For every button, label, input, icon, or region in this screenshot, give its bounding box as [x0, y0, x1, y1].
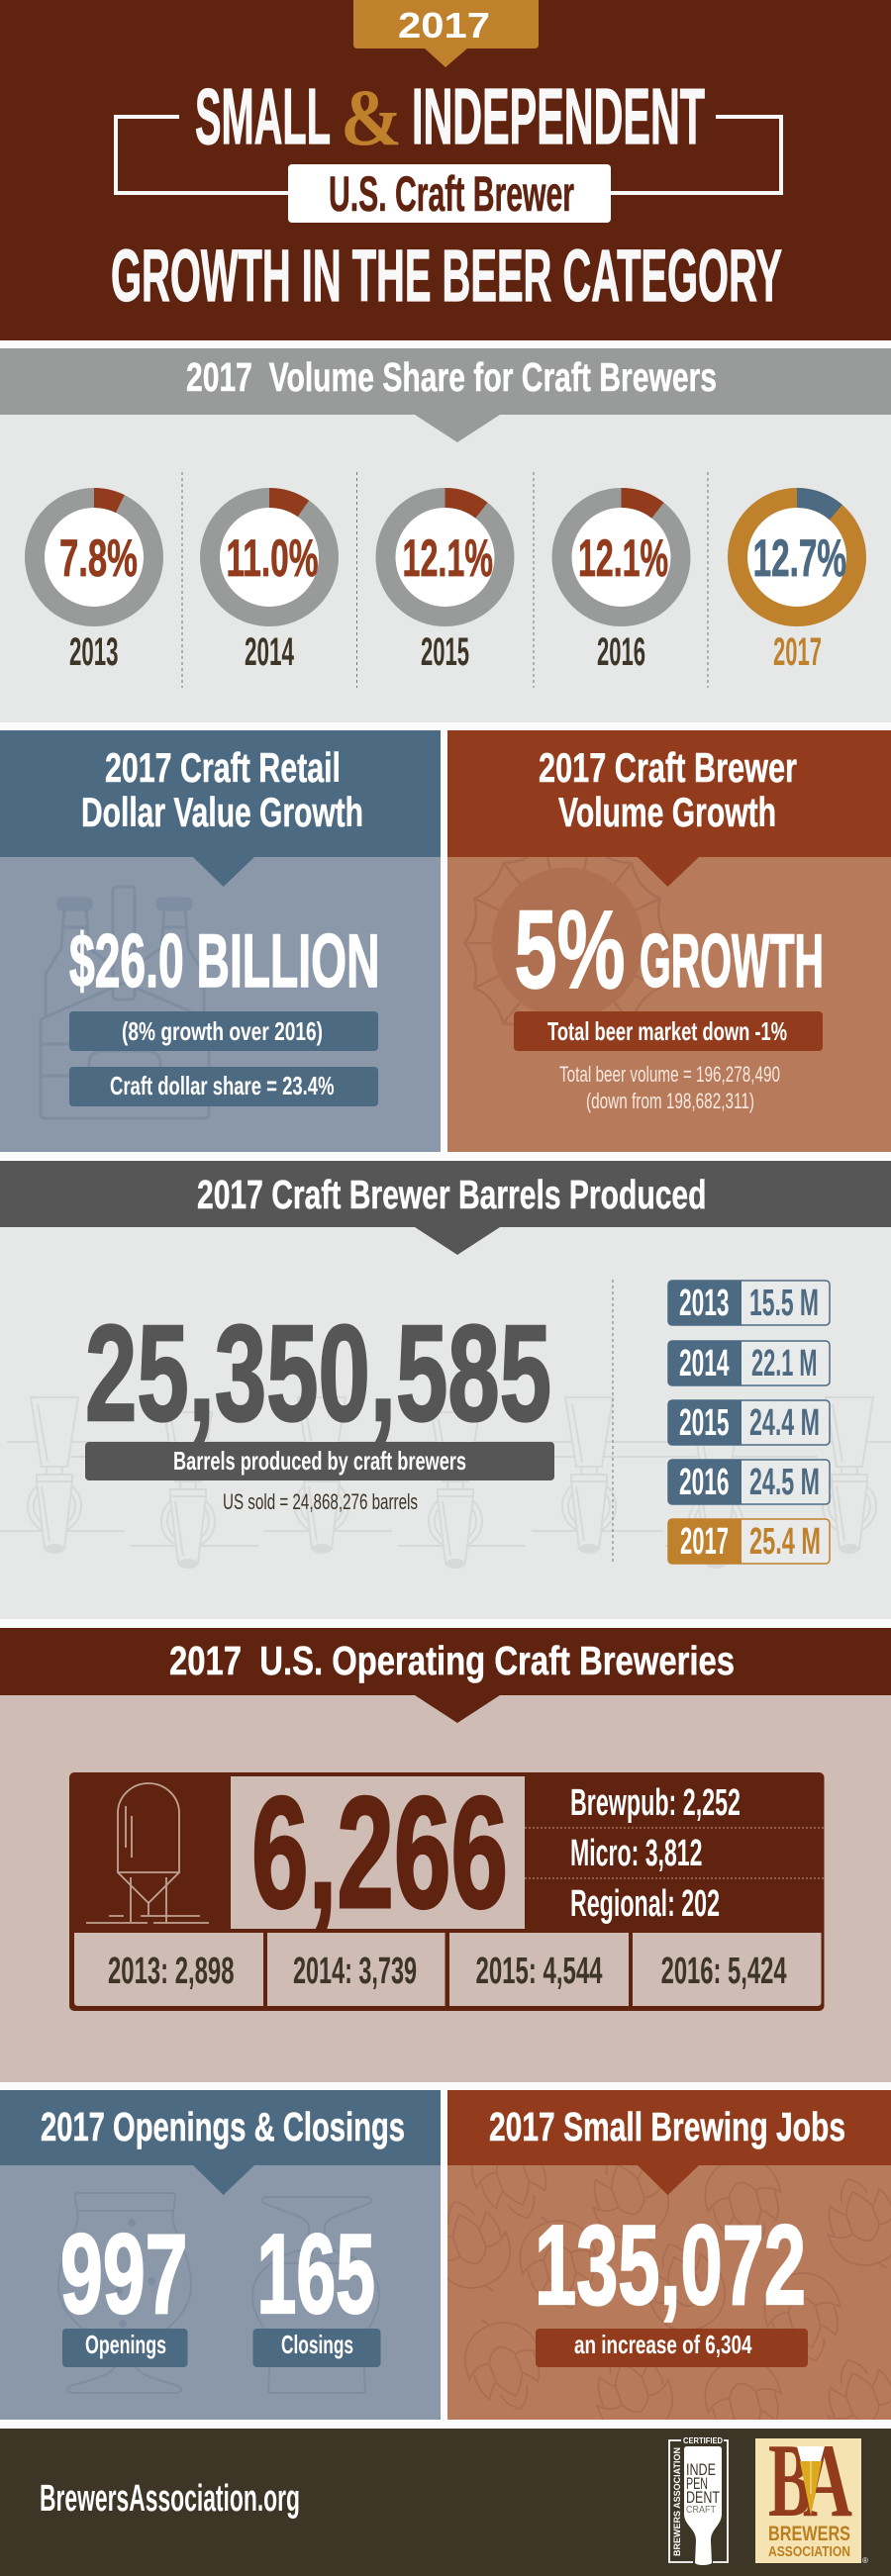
donut 2014 — [210, 498, 329, 674]
text: website: BrewersAssociation.org — [40, 2478, 300, 2520]
list: brewery types: Regional: 202 — [570, 1883, 720, 1925]
logo: certified independent craft: CRAFT — [686, 2505, 716, 2516]
panel: operating craft breweries — [0, 1628, 891, 2082]
pill 2016: 2016 — [679, 1462, 729, 1503]
text: total beer volume — [559, 1062, 780, 1113]
logo: brewers association — [755, 2423, 861, 2563]
donut 2015 — [386, 498, 505, 674]
pill 2013: 2013 — [679, 1283, 729, 1324]
donut 2016 — [562, 498, 681, 674]
logo: certified independent craft: PEN — [686, 2474, 708, 2493]
pill 2015 — [668, 1400, 830, 1445]
donut 2016: 2016 — [597, 630, 645, 674]
pill 2014: 22.1 M — [751, 1343, 818, 1384]
title: small and independent — [195, 72, 705, 162]
list: brewery types — [570, 1782, 741, 1925]
text: total beer volume: Total beer volume = 196,278,490 — [559, 1062, 780, 1087]
logo: brewers association: B — [768, 2423, 812, 2538]
title: small and independent: SMALL — [195, 72, 331, 160]
pill 2017: 2017 — [680, 1521, 729, 1563]
callout: total beer market — [514, 1011, 823, 1051]
callout: increase — [536, 2329, 808, 2367]
panel: footer — [0, 2423, 891, 2576]
stat: total breweries: 6,266 — [251, 1764, 508, 1941]
icon: beer taps watermark — [0, 1397, 891, 1569]
pill 2015: 2015 — [679, 1402, 729, 1444]
callout: craft dollar share — [69, 1067, 378, 1106]
donut 2017: 2017 — [773, 630, 822, 674]
callout: craft dollar share: Craft dollar share = 23.4% — [110, 1071, 335, 1100]
panel: small brewing jobs — [447, 2090, 891, 2420]
callout: barrels produced by craft brewers: Barrels produced by craft brewers — [173, 1446, 466, 1476]
callout: increase: an increase of 6,304 — [574, 2330, 752, 2359]
heading: operating craft breweries: 2017 U.S. Operating Craft Breweries — [169, 1638, 735, 1683]
logo: certified independent craft: BREWERS ASSOCIATION — [672, 2447, 683, 2556]
stat: 5 percent growth: 5% — [515, 888, 626, 1011]
callout: barrels produced by craft brewers — [85, 1442, 554, 1480]
donut 2013: 2013 — [69, 630, 119, 674]
brewery table frame — [69, 1772, 824, 2011]
label: openings — [62, 2329, 188, 2367]
list: brewery types: Micro: 3,812 — [570, 1833, 703, 1874]
cell 2013: 2013: 2,898 — [108, 1951, 234, 1992]
callout: total beer market: Total beer market down -1% — [547, 1016, 787, 1046]
cell 2014: 2014: 3,739 — [293, 1951, 417, 1992]
stat: 26 billion: $26.0 BILLION — [69, 919, 380, 1003]
pill 2013 — [668, 1281, 830, 1325]
donut 2017 — [738, 498, 856, 674]
stat: 5 percent growth — [515, 888, 824, 1011]
text: total beer volume: (down from 198,682,311) — [586, 1089, 754, 1113]
subtitle box — [288, 164, 611, 223]
logo: certified independent craft: CERTIFIED — [683, 2436, 723, 2445]
logo: certified independent craft: INDE — [686, 2460, 716, 2479]
logo: certified independent craft — [669, 2436, 728, 2565]
donut 2013 — [35, 498, 153, 674]
panel: volume growth — [447, 730, 891, 1152]
donut 2013: 7.8% — [59, 529, 138, 588]
panel: barrels produced — [0, 1161, 891, 1619]
logo: brewers association: BREWERS — [768, 2523, 850, 2545]
panel: volume share — [0, 348, 891, 722]
logo: brewers association: A — [803, 2423, 852, 2538]
cell 2015: 2015: 4,544 — [475, 1951, 602, 1992]
pill 2014: 2014 — [679, 1343, 729, 1384]
stat: openings: 997 — [60, 2212, 188, 2337]
stat: barrels total: 25,350,585 — [85, 1297, 551, 1450]
callout: 8 percent growth: (8% growth over 2016) — [122, 1016, 323, 1046]
donut 2016: 12.1% — [578, 529, 668, 588]
logo: certified independent craft: DENT — [686, 2488, 720, 2507]
pill 2016 — [668, 1460, 830, 1504]
list: brewery types: Brewpub: 2,252 — [570, 1782, 741, 1824]
pill 2014 — [668, 1341, 830, 1385]
cell 2013 — [74, 1933, 263, 2006]
pill 2017: 25.4 M — [749, 1521, 821, 1563]
pill 2013: 15.5 M — [749, 1283, 819, 1324]
panel: openings and closings — [0, 2090, 441, 2420]
year tag — [353, 0, 539, 67]
cell 2014 — [267, 1933, 446, 2006]
pill 2016: 24.5 M — [749, 1462, 820, 1503]
title: small and independent: & — [341, 72, 402, 162]
heading: openings and closings: 2017 Openings & Closings — [41, 2104, 405, 2149]
panel: retail dollar value — [0, 730, 441, 1152]
icon: bottle cap watermark — [464, 843, 670, 1043]
pill 2017 — [668, 1519, 830, 1564]
subtitle box: U.S. Craft Brewer — [329, 166, 574, 222]
callout: 8 percent growth — [69, 1011, 378, 1051]
donut 2014: 2014 — [245, 630, 294, 674]
panel: header — [0, 0, 891, 340]
heading: volume growth: Volume Growth — [558, 789, 776, 835]
heading: barrels produced: 2017 Craft Brewer Barrels Produced — [197, 1172, 707, 1217]
icon: fermentation tank — [86, 1783, 209, 1923]
heading: retail dollar value: 2017 Craft Retail — [105, 744, 341, 791]
icon: beer glasses watermark — [58, 2193, 379, 2393]
label: closings: Closings — [281, 2330, 353, 2359]
stat: closings: 165 — [257, 2212, 375, 2337]
donut 2014: 11.0% — [226, 529, 319, 588]
heading: volume share: 2017 Volume Share for Craft Brewers — [186, 354, 717, 400]
title bracket — [116, 117, 781, 193]
cell 2016 — [633, 1933, 822, 2006]
label: openings: Openings — [85, 2330, 166, 2359]
pill 2015: 24.4 M — [749, 1402, 820, 1444]
heading: volume growth: 2017 Craft Brewer — [539, 744, 797, 791]
heading: retail dollar value — [81, 744, 363, 835]
heading: retail dollar value: Dollar Value Growth — [81, 789, 363, 835]
stat: total breweries — [231, 1764, 525, 1941]
label: closings — [253, 2329, 380, 2367]
text: US sold: US sold = 24,868,276 barrels — [223, 1489, 418, 1514]
year tag: 2017 — [398, 5, 490, 46]
icon: hops watermark — [447, 2165, 891, 2420]
logo: brewers association: ASSOCIATION — [768, 2544, 850, 2560]
donut 2015: 2015 — [421, 630, 469, 674]
registered mark: ® — [862, 2556, 868, 2565]
icon: bottles watermark — [41, 887, 209, 1118]
heading: volume growth — [539, 744, 797, 835]
cell 2015 — [449, 1933, 629, 2006]
donut 2015: 12.1% — [402, 529, 493, 588]
cell 2016: 2016: 5,424 — [661, 1951, 787, 1992]
